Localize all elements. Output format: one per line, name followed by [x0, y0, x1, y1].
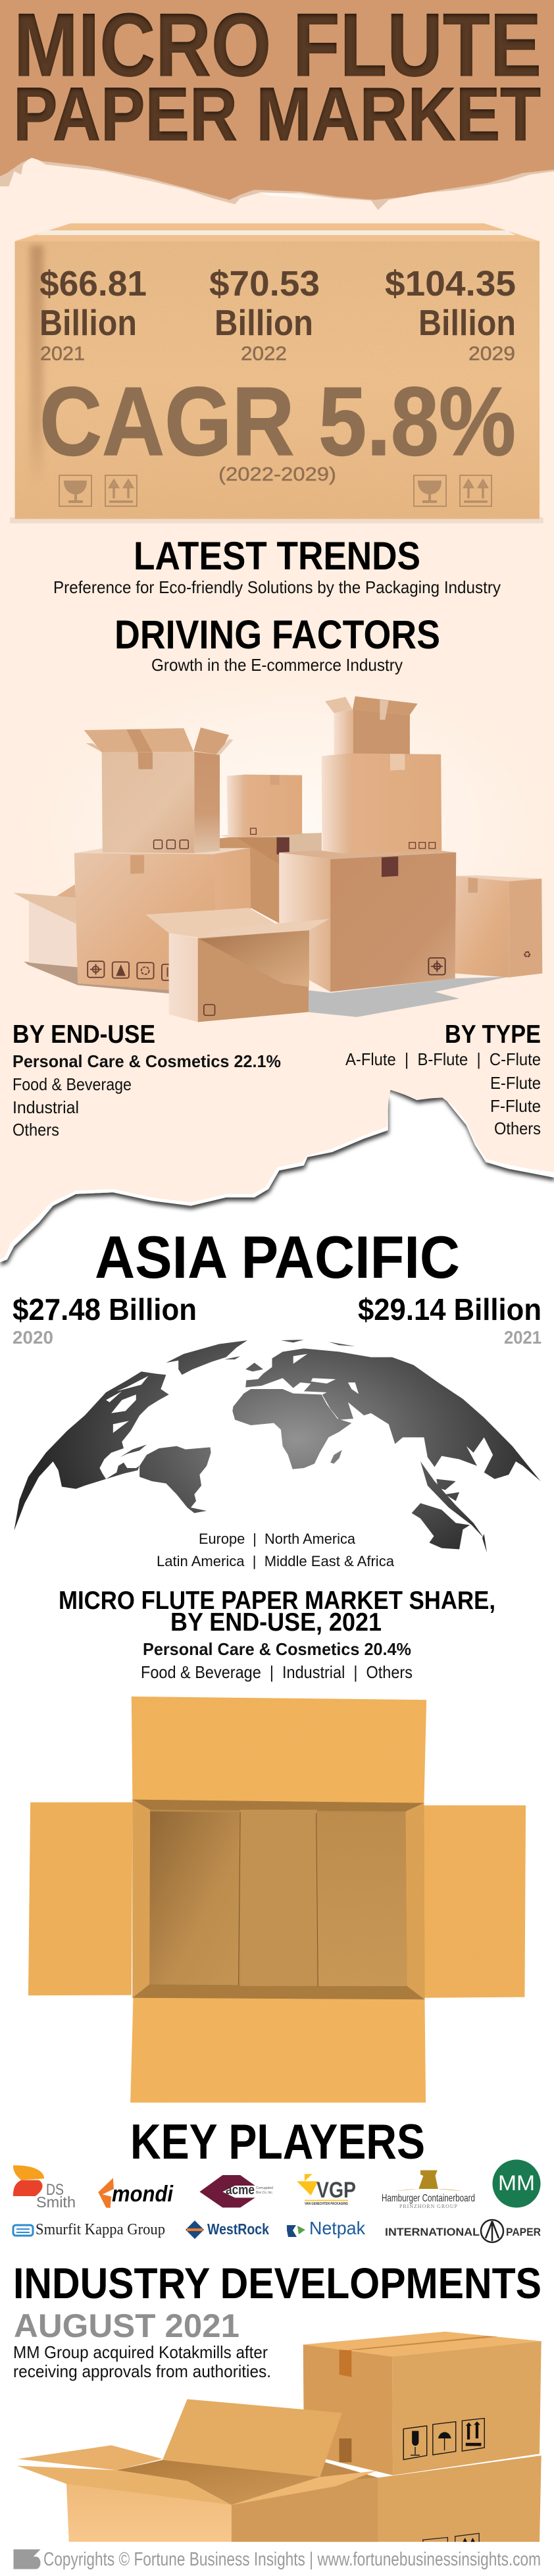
value 2022 [209, 264, 320, 365]
panel: cream torn paper background [0, 0, 554, 1262]
value 2022: 2022 [241, 343, 287, 365]
box: far left open [13, 884, 78, 967]
value 2021: 2021 [40, 343, 85, 365]
panel: by type [345, 1020, 541, 1138]
logo: MM [492, 2159, 541, 2208]
list [345, 1049, 541, 1138]
box: lower right [320, 2456, 541, 2542]
text: market share list: Personal Care & Cosmetics 20.4% [143, 1639, 411, 1659]
logo: International Paper: PAPER [506, 2226, 541, 2238]
box: middle right [322, 753, 441, 854]
logo: Smurfit Kappa: Smurfit Kappa Group [36, 2221, 165, 2238]
illustration: open empty box from above [28, 1696, 526, 2103]
logo: WestRock: WestRock [207, 2221, 269, 2238]
icons: handling marks right [414, 475, 491, 506]
heading: asia pacific: ASIA PACIFIC [95, 1224, 460, 1291]
heading: BY END-USE [13, 1020, 155, 1049]
panel: by end-use [13, 1020, 281, 1140]
illustration: stacked and open cardboard boxes [17, 2332, 541, 2542]
logo: Hamburger Containerboard: PRINZHORN GROUP [399, 2203, 458, 2209]
text: development detail: MM Group acquired Kotakmills after [13, 2342, 268, 2362]
value 2020 [13, 1292, 197, 1348]
list: Industrial [13, 1097, 79, 1117]
other regions [157, 1531, 395, 1569]
heading: key players: KEY PLAYERS [130, 2114, 425, 2169]
value 2029: 2029 [468, 343, 515, 365]
value 2029: $104.35 [385, 264, 516, 303]
box: rear center [214, 833, 322, 924]
world globe map [14, 1340, 541, 1552]
logo: International Paper [385, 2220, 541, 2242]
box: small center [227, 775, 302, 837]
logo: acme: Box Co. Inc. [256, 2191, 273, 2195]
inland water [106, 1354, 359, 1433]
icon: fortune business insights logo [14, 2550, 39, 2568]
logo: acme [199, 2175, 273, 2207]
heading: market share by end-use: BY END-USE, 2021 [170, 1608, 382, 1637]
logo: DS Smith: Smith [36, 2194, 76, 2211]
value 2021: Billion [39, 302, 137, 343]
logo: Netpak: Netpak [309, 2218, 366, 2238]
value 2020: 2020 [13, 1327, 53, 1348]
list: F-Flute [490, 1096, 541, 1116]
logo: acme: acme [226, 2183, 255, 2197]
value 2022: Billion [214, 302, 313, 343]
list: Personal Care & Cosmetics 22.1% [13, 1051, 281, 1071]
logo: MM: MM [498, 2171, 535, 2195]
logo: mondi [98, 2178, 174, 2208]
value 2021 [358, 1292, 541, 1348]
heading: market share by end-use [59, 1587, 495, 1637]
value 2020: $27.48 Billion [13, 1292, 197, 1327]
value 2029: Billion [418, 302, 516, 343]
panel: cardboard box with market values [10, 223, 543, 523]
value 2021 [39, 264, 147, 365]
value 2021: $66.81 [39, 264, 147, 303]
heading: BY TYPE [445, 1020, 541, 1049]
logo: acme: Corrugated [256, 2186, 273, 2190]
heading: latest trends: LATEST TRENDS [134, 534, 420, 578]
text: latest trends detail: Preference for Eco-friendly Solutions by the Packaging Industry [53, 577, 501, 597]
shadow [307, 977, 509, 1017]
subheading: august 2021: AUGUST 2021 [14, 2307, 239, 2344]
value 2022: $70.53 [209, 264, 320, 303]
other regions: Europe | North America [199, 1531, 356, 1547]
icons: handling marks left [59, 475, 137, 506]
logo: International Paper: INTERNATIONAL [385, 2226, 480, 2238]
value 2021: $29.14 Billion [358, 1292, 541, 1327]
list [13, 1051, 281, 1140]
value 2029 [385, 264, 516, 365]
box: upper right open [325, 697, 418, 755]
box: front open [145, 908, 329, 1022]
box: upper left open [84, 727, 233, 853]
logo: Hamburger Containerboard [382, 2170, 475, 2209]
text: market share list: Food & Beverage | Industrial | Others [141, 1662, 413, 1682]
text: development detail [13, 2342, 271, 2381]
logo: DS Smith: DS [46, 2181, 64, 2199]
logo: mondi: mondi [112, 2182, 174, 2207]
logo: WestRock [186, 2221, 269, 2239]
heading: market share by end-use: MICRO FLUTE PAPER MARKET SHARE, [59, 1587, 495, 1615]
logos: key players [13, 2159, 541, 2242]
list: E-Flute [490, 1073, 541, 1093]
text: development detail: receiving approvals from authorities. [13, 2361, 271, 2381]
logo: Hamburger Containerboard: Hamburger Containerboard [382, 2193, 475, 2204]
logo: VGP: VAN GENECHTEN PACKAGING [305, 2202, 348, 2206]
text: driving factors detail: Growth in the E-commerce Industry [151, 655, 403, 675]
list: A-Flute | B-Flute | C-Flute [345, 1049, 541, 1069]
other regions: Latin America | Middle East & Africa [157, 1553, 395, 1569]
logo: VGP [297, 2174, 356, 2206]
text: market share list [141, 1639, 413, 1682]
box: large left [74, 848, 251, 990]
list: Food & Beverage [13, 1074, 132, 1094]
box: far right [455, 876, 542, 978]
title [13, 0, 541, 157]
CAGR period: (2022-2029) [218, 464, 336, 485]
box: open front [17, 2399, 378, 2542]
shadow [24, 962, 170, 993]
box: far right: ♻ [523, 950, 531, 960]
heading: driving factors: DRIVING FACTORS [114, 612, 440, 657]
box: large right [279, 851, 456, 992]
panel: torn cardboard header [0, 0, 554, 210]
value 2021: 2021 [504, 1327, 541, 1348]
list: Others [494, 1118, 541, 1138]
logo: VGP: VGP [316, 2178, 356, 2203]
list: Others [13, 1120, 59, 1140]
box: upper right [303, 2332, 541, 2475]
logo: DS Smith [13, 2165, 76, 2211]
illustration: stacked cardboard boxes [13, 668, 554, 1022]
